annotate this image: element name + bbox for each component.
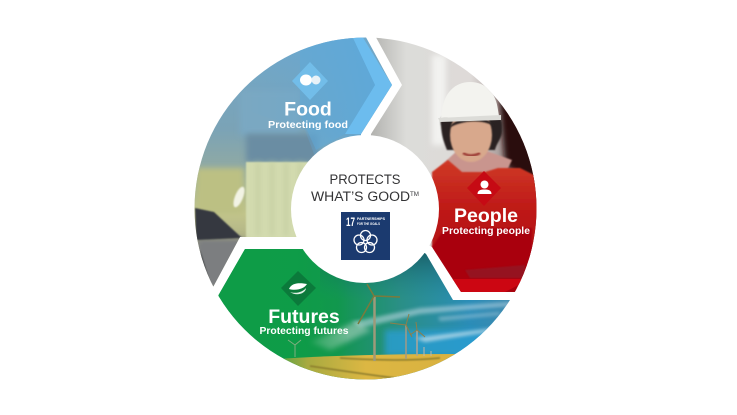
heading: protects what's good: PROTECTS xyxy=(330,172,400,187)
wheat field xyxy=(284,354,455,380)
label: people: Protecting people xyxy=(442,226,530,237)
heading: protects what's good xyxy=(311,172,419,204)
green chevron panel xyxy=(218,249,345,368)
label: futures: Futures xyxy=(268,306,340,328)
heading: protects what's good: TM xyxy=(410,192,419,198)
label: people xyxy=(442,205,530,237)
icon: futures diamond xyxy=(281,271,316,306)
label: futures xyxy=(260,306,349,337)
icon: SDG 17 badge: PARTNERSHIPS xyxy=(357,217,385,221)
heading: protects what's good: WHAT’S GOOD xyxy=(311,189,407,204)
panel: people segment xyxy=(370,38,536,292)
panel: food segment xyxy=(194,38,392,286)
label: people: People xyxy=(454,205,518,227)
label: futures: Protecting futures xyxy=(260,326,349,337)
panel: futures segment xyxy=(218,249,510,380)
icon: people diamond xyxy=(467,171,501,206)
icon: SDG 17 badge: FOR THE GOALS xyxy=(357,222,380,226)
icon: food diamond xyxy=(292,62,328,100)
food blue chevron overlay xyxy=(296,38,392,155)
wind turbines xyxy=(288,284,431,361)
center circle xyxy=(291,135,439,283)
icon: SDG 17 badge xyxy=(341,212,390,260)
label: food xyxy=(268,98,348,131)
landscape photo xyxy=(218,249,510,380)
label: food: Food xyxy=(284,98,332,120)
food photo xyxy=(194,38,392,286)
people photo xyxy=(370,38,536,292)
icon: SDG 17 badge: 17 xyxy=(346,215,355,229)
label: food: Protecting food xyxy=(268,120,348,131)
